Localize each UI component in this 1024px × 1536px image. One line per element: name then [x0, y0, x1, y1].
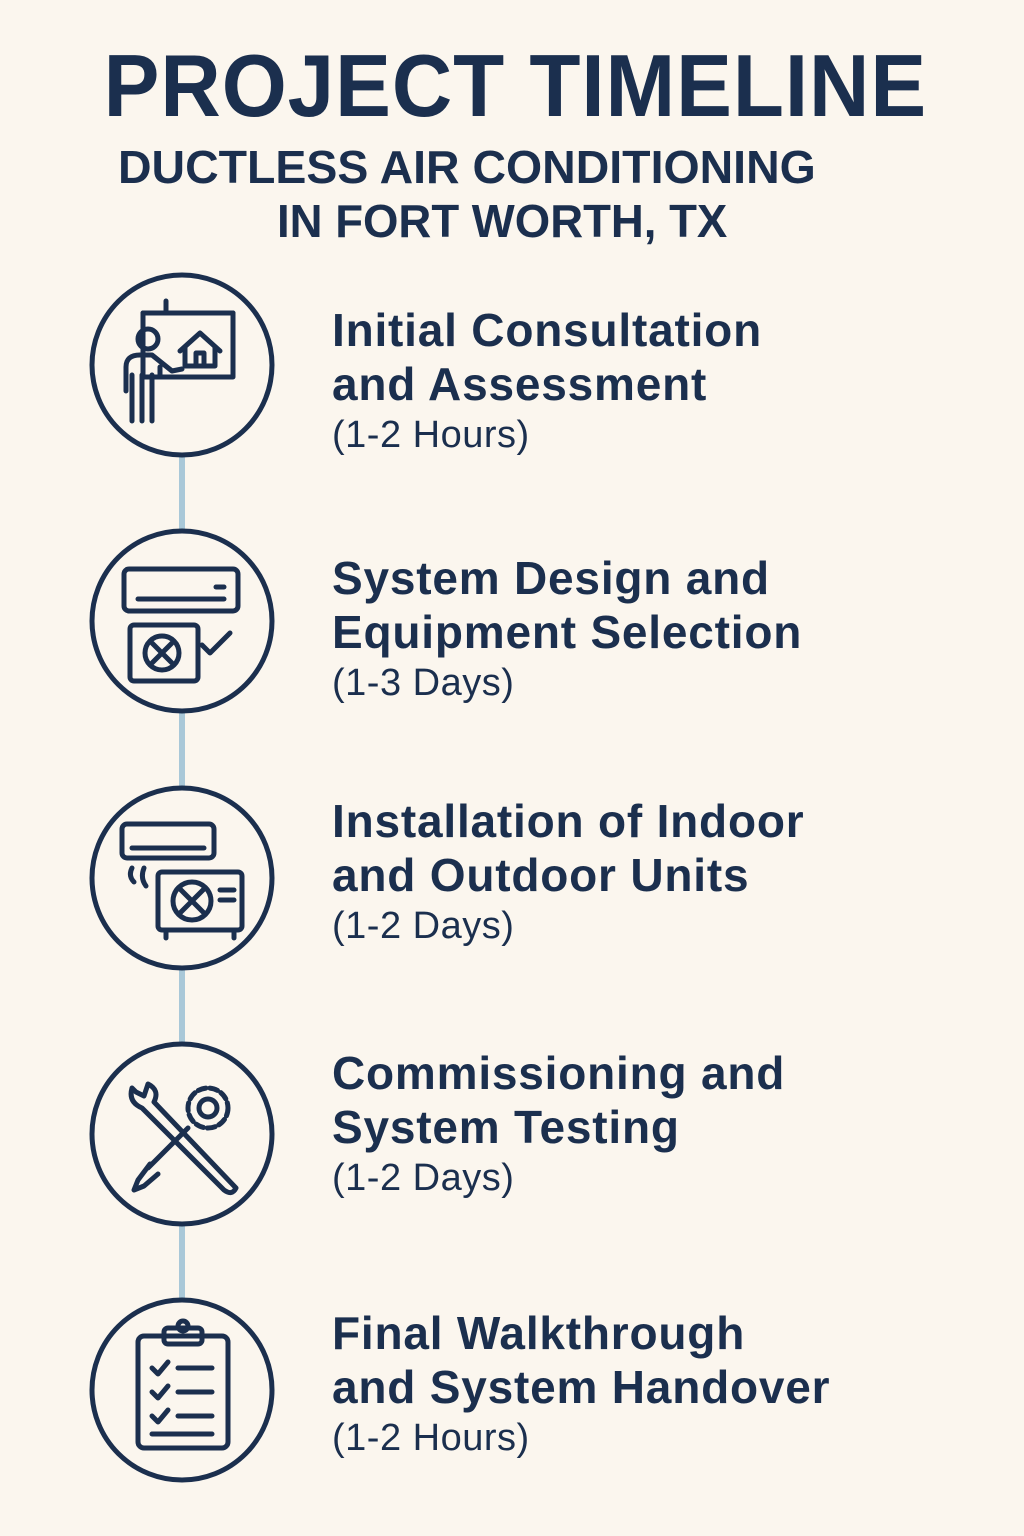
step 3 icon: indoor and outdoor units [90, 786, 274, 970]
step 5 text: and System Handover [332, 1361, 830, 1413]
step 5 icon: checklist clipboard [90, 1298, 274, 1482]
step 1 text [332, 304, 762, 456]
timeline connectors [179, 455, 185, 1305]
step 3 text [332, 795, 804, 947]
step 4 text [332, 1047, 785, 1199]
step 2 text: Equipment Selection [332, 606, 802, 658]
step 5 text: (1-2 Hours) [332, 1417, 530, 1459]
subtitle: IN FORT WORTH, TX [277, 195, 727, 247]
step 1 text: and Assessment [332, 358, 707, 410]
step 4 text: (1-2 Days) [332, 1157, 514, 1199]
step 2 text [332, 552, 802, 704]
step 1 icon: presenter [90, 272, 274, 458]
step 5 text: Final Walkthrough [332, 1307, 745, 1359]
step 4 text: Commissioning and [332, 1047, 785, 1099]
step 2 icon: AC unit with check [90, 528, 274, 714]
step 4 text: System Testing [332, 1101, 680, 1153]
step 3 text: (1-2 Days) [332, 905, 514, 947]
step 5 text [332, 1307, 830, 1459]
step 4 icon: tools and gear [90, 1042, 274, 1226]
step 1 text: (1-2 Hours) [332, 414, 530, 456]
subtitle [118, 141, 816, 247]
step 2 text: (1-3 Days) [332, 662, 514, 704]
step 1 text: Initial Consultation [332, 304, 762, 356]
step 3 text: Installation of Indoor [332, 795, 804, 847]
step 2 text: System Design and [332, 552, 770, 604]
title: PROJECT TIMELINE [103, 36, 927, 135]
subtitle: DUCTLESS AIR CONDITIONING [118, 141, 816, 193]
step 3 text: and Outdoor Units [332, 849, 749, 901]
